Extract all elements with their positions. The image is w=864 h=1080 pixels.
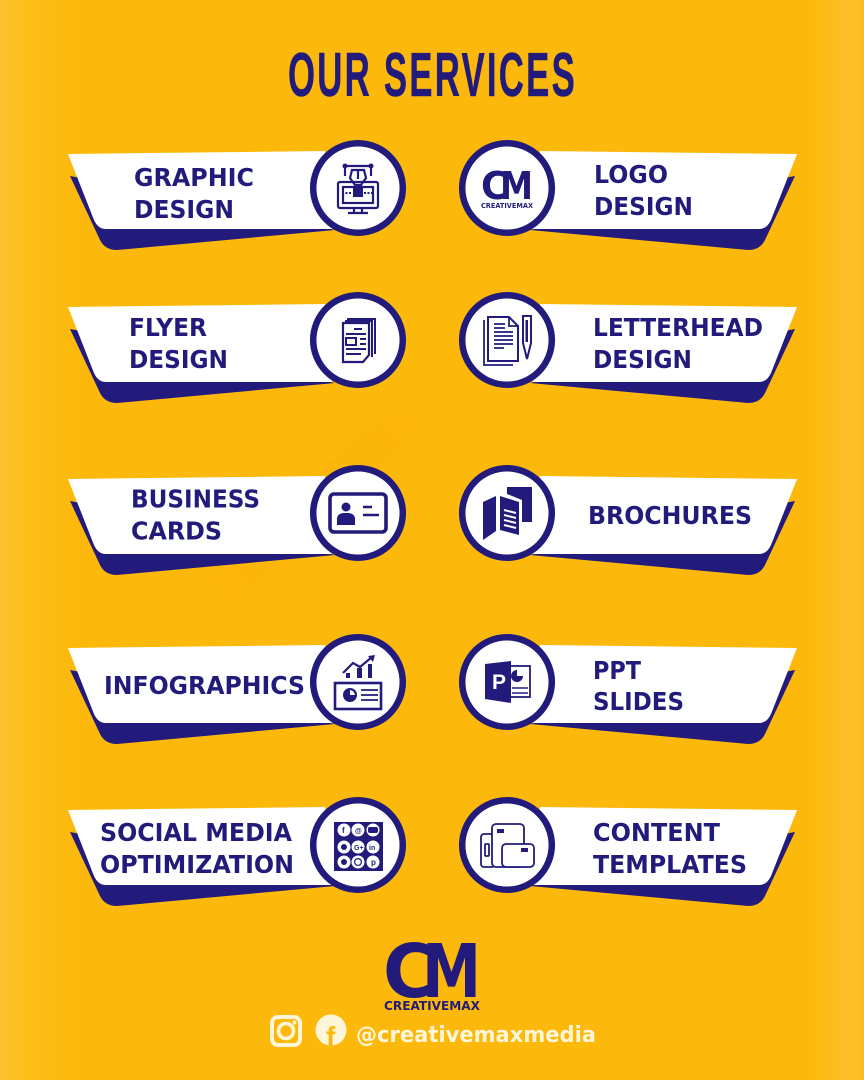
label: PPT: [593, 656, 641, 685]
banner shape: [530, 304, 797, 403]
panel: brochures: [462, 468, 797, 575]
label: DESIGN: [129, 345, 228, 374]
banner shape: [68, 304, 335, 403]
icon: CM logo: CREATIVEMAX: [481, 202, 534, 210]
logo: CreativeMax: [383, 929, 481, 1015]
icon: folded brochure: [462, 468, 552, 558]
icon: social grid: f: [342, 826, 345, 835]
label: CONTENT: [593, 818, 720, 847]
icon: chart and report: [313, 637, 403, 727]
label: [129, 313, 228, 374]
banner shape: [68, 807, 335, 906]
panel: graphic design: [68, 143, 403, 250]
banner shape: [530, 807, 797, 906]
icon: social grid: in: [369, 845, 375, 852]
icon: monitor with pen tool: [313, 143, 403, 233]
icon: template cards: [462, 800, 552, 890]
label: [593, 656, 684, 716]
icon: powerpoint: [462, 637, 552, 727]
label: SLIDES: [593, 687, 684, 716]
label: GRAPHIC: [134, 163, 254, 192]
label: LOGO: [594, 160, 668, 189]
label: SOCIAL MEDIA: [100, 818, 292, 847]
label: LETTERHEAD: [593, 313, 763, 342]
icon: document and pen: [462, 295, 552, 385]
logo: CreativeMax: C: [383, 929, 435, 1015]
social handle: @creativemaxmedia: [356, 1023, 596, 1048]
icon: social grid: [313, 800, 403, 890]
icon: CM logo: [462, 143, 552, 233]
label: [594, 160, 693, 221]
icon: social grid: @: [355, 828, 362, 835]
panel: letterhead design: [462, 295, 797, 403]
icon: CM logo: M: [500, 164, 533, 208]
label: DESIGN: [594, 192, 693, 221]
icon: facebook: [316, 1014, 346, 1052]
icon: facebook: f: [326, 1021, 336, 1052]
logo: CreativeMax: CREATIVEMAX: [384, 998, 480, 1013]
banner shape: [530, 151, 797, 250]
icon: social grid: G+: [354, 845, 364, 852]
banner shape: [68, 151, 335, 250]
label: CARDS: [131, 516, 222, 546]
banner shape: [530, 476, 797, 575]
banner shape: [68, 645, 335, 744]
panel: business cards: [68, 468, 403, 575]
label: TEMPLATES: [593, 850, 747, 879]
title: OUR SERVICES: [288, 41, 577, 110]
panel: logo design: [462, 143, 797, 250]
icon: ID card: [313, 468, 403, 558]
panel: ppt slides: [462, 637, 797, 744]
logo: CreativeMax: M: [422, 929, 481, 1015]
label: BUSINESS: [131, 484, 260, 514]
label: BROCHURES: [588, 501, 752, 530]
label: [134, 163, 254, 224]
icon: CM logo: C: [481, 164, 508, 208]
icon: social grid: p: [371, 858, 376, 867]
label: [593, 313, 763, 374]
panel: infographics: [68, 637, 403, 744]
icon: instagram: [272, 1017, 300, 1045]
icon: powerpoint: P: [492, 671, 506, 694]
panel: flyer design: [68, 295, 403, 403]
label: FLYER: [129, 313, 207, 342]
label: [100, 818, 294, 879]
label: INFOGRAPHICS: [104, 671, 305, 700]
icon: flyer stack: [313, 295, 403, 385]
banner shape: [530, 645, 797, 744]
panel: content templates: [462, 800, 797, 906]
label: DESIGN: [593, 345, 692, 374]
label: DESIGN: [134, 195, 234, 224]
label: [131, 484, 260, 546]
panel: social media optimization: [68, 800, 403, 906]
label: OPTIMIZATION: [100, 850, 294, 879]
banner shape: [68, 476, 335, 575]
label: [593, 818, 747, 879]
